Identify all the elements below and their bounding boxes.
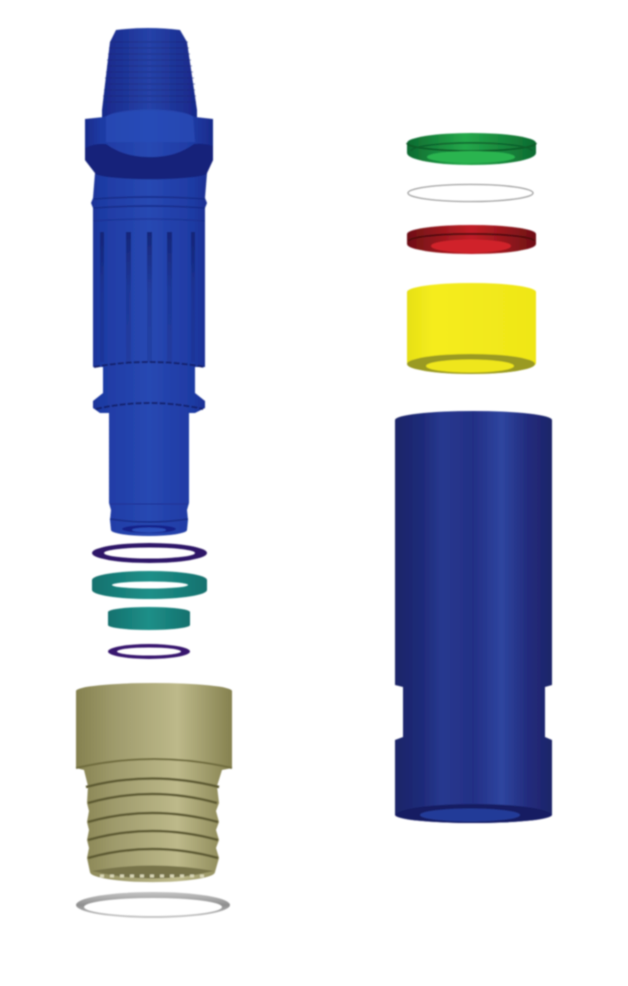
part: yellow sleeve	[407, 283, 536, 374]
part: red seal ring	[407, 225, 536, 254]
part: navy outer barrel	[395, 411, 552, 823]
part: teal ring	[92, 571, 207, 599]
part: thin white ring	[408, 184, 533, 202]
part: silver ring	[76, 892, 230, 918]
part: purple ring large	[92, 543, 207, 563]
part: teal solid bushing	[108, 607, 190, 630]
part: blue threaded mandrel	[85, 28, 213, 536]
part: purple ring small	[108, 644, 190, 659]
part: green seal ring	[407, 133, 536, 165]
part: olive threaded nut	[76, 683, 232, 882]
